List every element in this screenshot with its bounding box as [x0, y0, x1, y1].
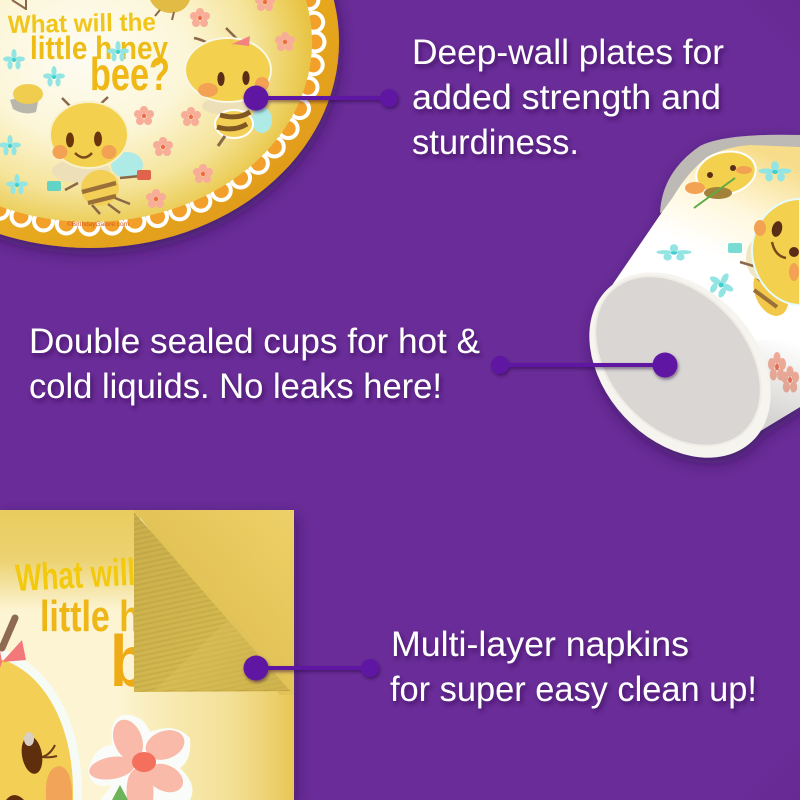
text: plates [412, 33, 724, 162]
plate rim [0, 0, 339, 248]
plate title: little h ney [30, 30, 168, 66]
text: plates: added strength and [412, 78, 721, 117]
text: napkins: for super easy clean up! [390, 670, 757, 709]
cup [584, 134, 800, 470]
top bees peeking [12, 0, 190, 20]
small bee on cup [685, 146, 760, 208]
napkin title: b [110, 622, 148, 702]
plate title: What will the [8, 8, 156, 39]
cup art [656, 146, 800, 433]
napkin right band [132, 687, 294, 800]
plate title [8, 8, 170, 100]
napkin top band [0, 510, 140, 610]
plate flowers [0, 0, 295, 208]
connector: plate [244, 86, 398, 110]
napkin title: What will [14, 552, 136, 600]
napkin sheet [0, 510, 294, 800]
scallop border [0, 0, 315, 225]
cup base inner [562, 244, 794, 478]
napkin title: little h [40, 592, 140, 641]
napkin [0, 510, 295, 800]
cup side shading [760, 347, 800, 436]
cup base outer [553, 236, 800, 494]
cup rim [660, 135, 800, 213]
connector: napkin [244, 656, 379, 680]
cup body [602, 145, 800, 433]
big bee on cup [728, 199, 800, 321]
text: cups [29, 322, 480, 406]
flap rib texture [134, 512, 290, 692]
text: plates: sturdiness. [412, 123, 579, 162]
text: plates: Deep-wall plates for [412, 33, 724, 72]
napkin upper right panel [134, 510, 294, 695]
plate title: bee? [90, 48, 170, 100]
connector: cup [491, 352, 678, 378]
plate well [0, 0, 312, 222]
text: napkins [390, 625, 757, 709]
napkin flower [87, 715, 192, 800]
copyright: ©BirthdayGalore.com [67, 221, 129, 228]
bee left [47, 97, 151, 214]
text: cups: cold liquids. No leaks here! [29, 367, 442, 406]
plate [0, 0, 339, 248]
bee right [185, 28, 272, 146]
napkin fold flap [134, 512, 290, 692]
honey pot [10, 84, 43, 113]
flap lighter triangle [155, 616, 290, 690]
text: cups: Double sealed cups for hot & [29, 322, 480, 361]
napkin title [14, 557, 134, 687]
napkin bee [0, 618, 82, 800]
text: napkins: Multi-layer napkins [391, 625, 689, 664]
